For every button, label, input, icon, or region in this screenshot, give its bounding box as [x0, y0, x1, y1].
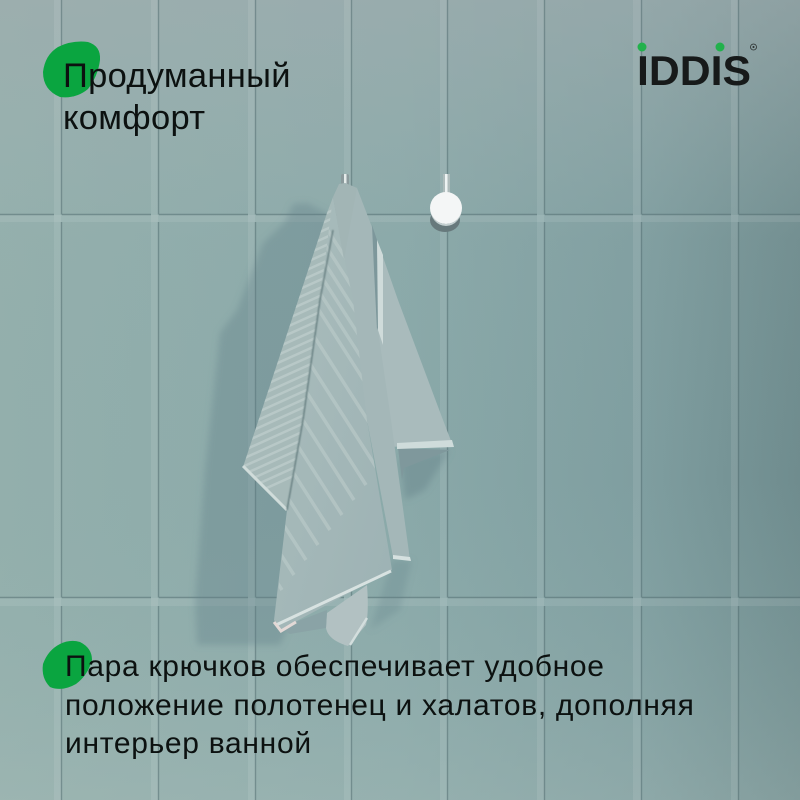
green blob: body marker [43, 641, 92, 689]
towel: under fold behind right panel [398, 448, 450, 480]
heading [63, 56, 291, 137]
towel [242, 183, 454, 646]
body text: положение полотенец и халатов, дополняя [65, 688, 695, 722]
body text: интерьер ванной [65, 727, 312, 760]
hook right (chrome hook) [430, 174, 462, 232]
towel: middle hanging panel [342, 183, 411, 561]
heading: Продуманный [63, 56, 291, 94]
towel: top fold over hook [333, 183, 357, 260]
green blob: heading marker [43, 42, 100, 97]
towel: right panel [372, 240, 454, 449]
towel: front diagonal striped panel [272, 199, 392, 633]
body text: Пара крючков обеспечивает удобное [65, 650, 605, 683]
heading: комфорт [63, 99, 205, 137]
body text [65, 650, 695, 760]
logo: IDDIS [637, 47, 751, 94]
towel shadow on wall [195, 203, 450, 645]
towel: lower tail [280, 585, 368, 646]
towel: left back panel [240, 197, 340, 510]
hook left (towel hook) [341, 174, 349, 186]
